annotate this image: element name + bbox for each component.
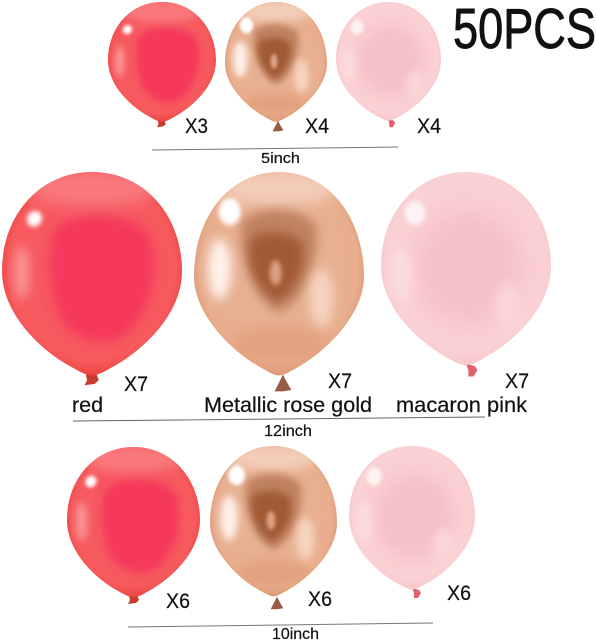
quantity: X6 rose gold: X6 — [308, 588, 332, 611]
size label: 5inch: 5inch — [261, 151, 300, 167]
quantity: X7 pink: X7 — [505, 370, 529, 393]
color label: red: red — [72, 394, 103, 417]
quantity: X7 rose gold: X7 — [328, 370, 352, 393]
balloon: 12 inch rose gold — [194, 170, 364, 391]
color label: macaron pink: macaron pink — [396, 394, 528, 417]
balloon: 5 inch rose gold — [225, 1, 327, 131]
balloon: 10 inch rose gold — [210, 445, 337, 609]
balloon: 5 inch red — [108, 1, 216, 127]
quantity: X7 red: X7 — [124, 373, 148, 396]
balloon: 12 inch pink — [381, 172, 551, 376]
balloon: 12 inch red — [2, 170, 182, 385]
quantity: X6 pink: X6 — [447, 582, 471, 605]
quantity: X6 red: X6 — [166, 590, 190, 613]
balloon: 5 inch pink — [336, 2, 441, 127]
quantity: X4 rose gold: X4 — [305, 115, 329, 138]
quantity: X3: X3 — [185, 115, 208, 138]
quantity: X4 pink: X4 — [417, 115, 441, 138]
size label: 12inch: 12inch — [264, 423, 312, 440]
color label: Metallic rose gold: Metallic rose gold — [204, 394, 372, 417]
balloon: 10 inch red — [67, 446, 200, 604]
balloon: 10 inch pink — [349, 446, 475, 598]
